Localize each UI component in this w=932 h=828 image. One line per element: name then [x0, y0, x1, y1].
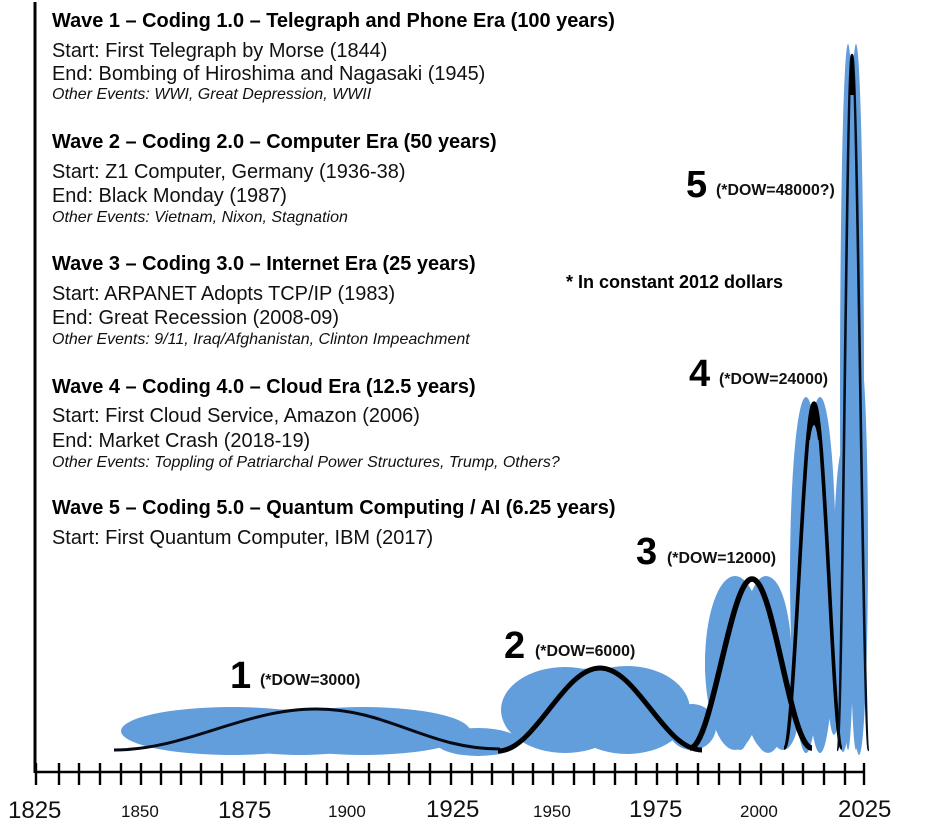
text block: wave 5 — [52, 497, 616, 549]
text block: wave 5: Start: First Quantum Computer, IBM (2017) — [52, 527, 433, 549]
curve: wave 1 — [114, 709, 500, 750]
time axis — [35, 763, 865, 785]
area: wave 1 — [121, 707, 470, 755]
label: wave 4 peak — [689, 353, 828, 395]
label: wave 1 peak — [230, 655, 360, 697]
label: wave 3 peak: (*DOW=12000) — [667, 550, 776, 567]
label: wave 4 peak: (*DOW=24000) — [719, 371, 828, 388]
area: wave 4 — [790, 397, 836, 753]
year labels: 2000 — [740, 802, 778, 821]
label: wave 1 peak: 1 — [230, 655, 251, 697]
curve peak: wave 4 thick top — [807, 402, 821, 440]
text block: wave 2: Other Events: Vietnam, Nixon, Stagnation — [52, 209, 348, 226]
text block: wave 4 — [52, 376, 560, 471]
vertical axis — [34, 2, 36, 773]
year labels: 1900 — [328, 802, 366, 821]
text block: wave 1: Other Events: WWI, Great Depression, WWII — [52, 86, 372, 103]
year labels: 1825 — [8, 797, 61, 824]
note: constant dollars: * In constant 2012 dollars — [566, 272, 783, 292]
curve: wave 2 — [498, 668, 702, 751]
text block: wave 4: End: Market Crash (2018-19) — [52, 430, 310, 452]
area: wave 2 to 3 link — [668, 704, 716, 750]
text block: wave 2 — [52, 131, 497, 226]
year labels: 1875 — [218, 797, 271, 824]
text block: wave 1 — [52, 10, 615, 103]
text block: wave 3 — [52, 253, 476, 348]
curve peak: wave 5 thick top — [849, 55, 855, 95]
text block: wave 1: Wave 1 – Coding 1.0 – Telegraph and Phone Era (100 years) — [52, 10, 615, 32]
label: wave 4 peak: 4 — [689, 353, 710, 395]
text block: wave 5: Wave 5 – Coding 5.0 – Quantum Computing / AI (6.25 years) — [52, 497, 616, 519]
year labels: 1925 — [426, 796, 479, 823]
text block: wave 2: Wave 2 – Coding 2.0 – Computer Era (50 years) — [52, 131, 497, 153]
label: wave 2 peak: (*DOW=6000) — [535, 643, 635, 660]
label: wave 3 peak: 3 — [636, 531, 657, 573]
area: wave 5 — [826, 44, 868, 755]
curve: wave 3 — [690, 579, 812, 748]
text block: wave 1: End: Bombing of Hiroshima and Nagasaki (1945) — [52, 63, 485, 85]
label: wave 5 peak: 5 — [686, 164, 707, 206]
chart: wave curves — [114, 55, 869, 751]
label: wave 2 peak: 2 — [504, 625, 525, 667]
area: wave 1 to 2 link — [436, 728, 520, 756]
text block: wave 2: Start: Z1 Computer, Germany (1936-38) — [52, 161, 405, 183]
label: wave 5 peak — [686, 164, 835, 206]
year labels — [8, 796, 891, 824]
label: wave 3 peak — [636, 531, 776, 573]
area: wave 3 — [705, 576, 799, 753]
curve: wave 5 — [837, 55, 869, 750]
year labels: 1950 — [533, 802, 571, 821]
text block: wave 1: Start: First Telegraph by Morse (1844) — [52, 40, 387, 62]
label: wave 5 peak: (*DOW=48000?) — [716, 182, 835, 199]
text block: wave 2: End: Black Monday (1987) — [52, 185, 287, 207]
label: wave 2 peak — [504, 625, 635, 667]
label: wave 1 peak: (*DOW=3000) — [260, 672, 360, 689]
year labels: 2025 — [838, 796, 891, 823]
year labels: 1850 — [121, 802, 159, 821]
text block: wave 3: Other Events: 9/11, Iraq/Afghanistan, Clinton Impeachment — [52, 331, 470, 348]
chart: wave area shapes — [121, 44, 868, 756]
curve: wave 4 — [784, 403, 842, 748]
text block: wave 4: Other Events: Toppling of Patriarchal Power Structures, Trump, Others? — [52, 454, 560, 471]
text block: wave 4: Start: First Cloud Service, Amazon (2006) — [52, 405, 420, 427]
year labels: 1975 — [629, 796, 682, 823]
text block: wave 3: End: Great Recession (2008-09) — [52, 307, 339, 329]
text block: wave 3: Start: ARPANET Adopts TCP/IP (1983) — [52, 283, 395, 305]
area: wave 2 — [501, 666, 690, 754]
text block: wave 3: Wave 3 – Coding 3.0 – Internet Era (25 years) — [52, 253, 476, 275]
text block: wave 4: Wave 4 – Coding 4.0 – Cloud Era (12.5 years) — [52, 376, 476, 398]
